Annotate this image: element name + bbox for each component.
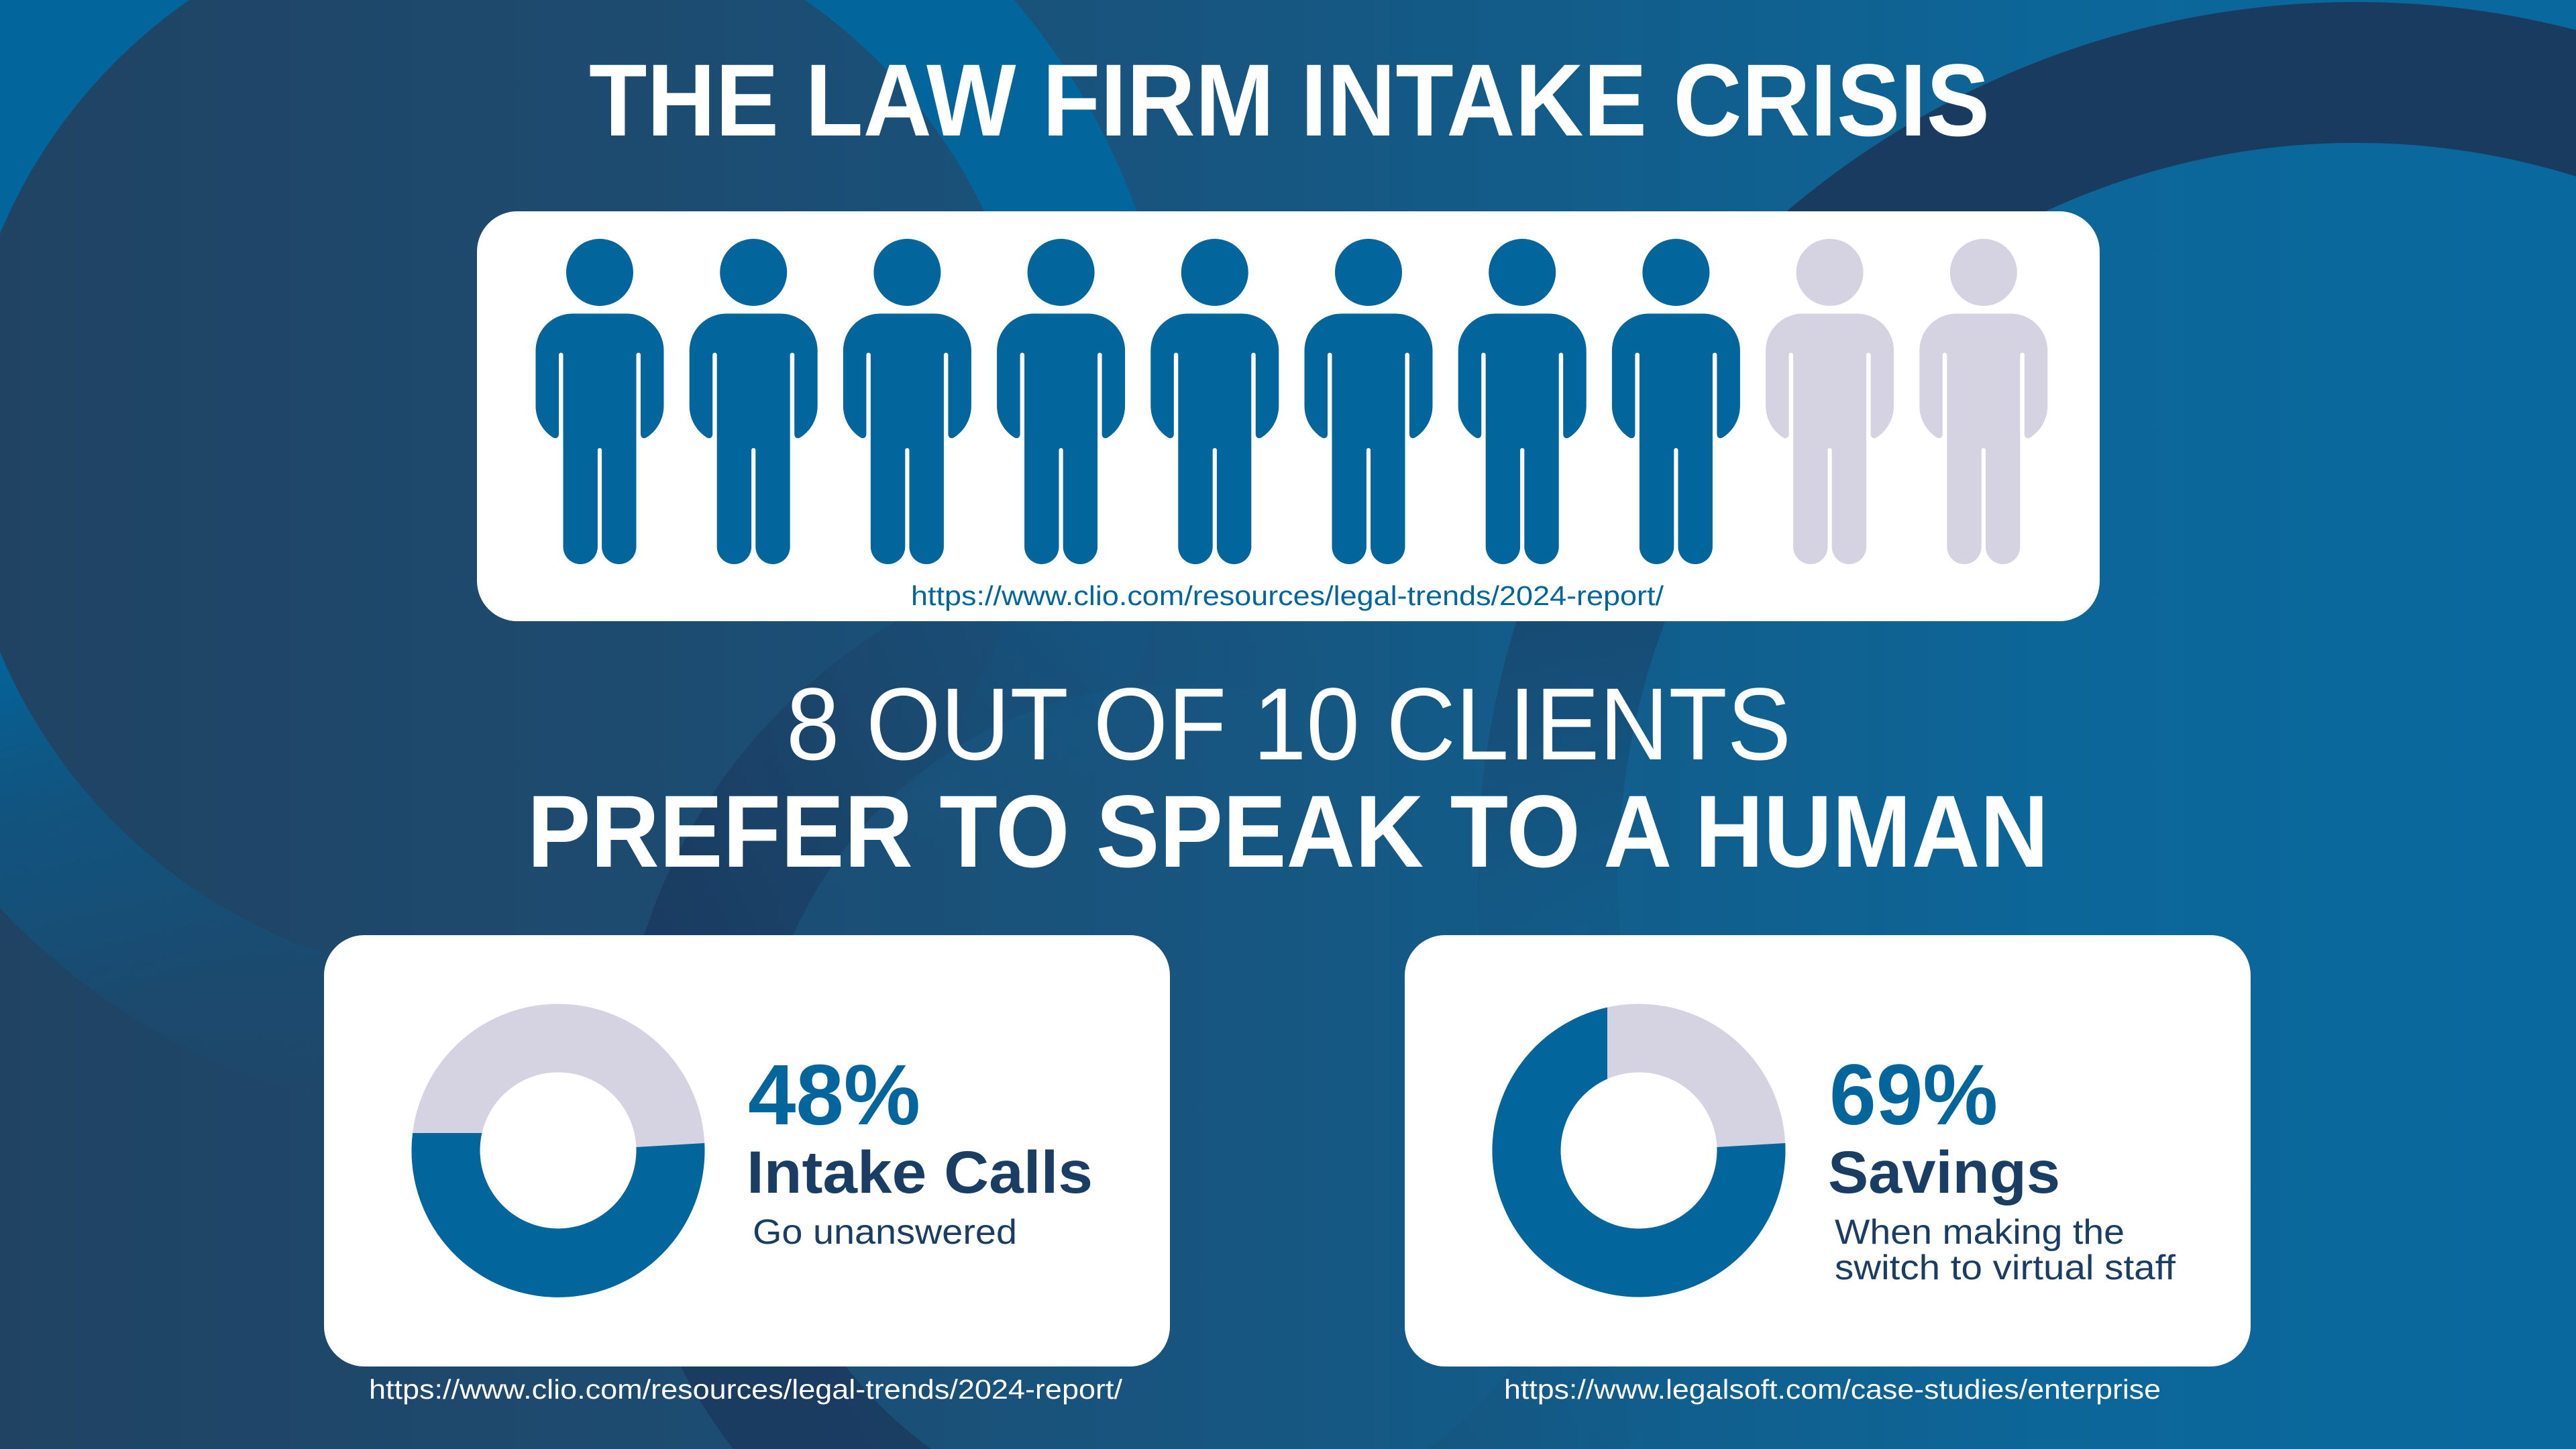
donut chart: 69% bbox=[1492, 1008, 1785, 1297]
stat: 69%: 69% bbox=[1829, 1047, 1998, 1143]
donut chart: 48% bbox=[411, 1038, 704, 1297]
heading: prefer to speak to a human: PREFER TO SPEAK TO A HUMAN bbox=[527, 774, 2049, 889]
description: when making the switch: switch to virtual staff bbox=[1835, 1248, 2176, 1287]
source link: https://www.clio.com/resources/legal-trends/2024-report/ bbox=[911, 580, 1664, 611]
icon: eight blue people bbox=[535, 239, 1740, 564]
source link: legalsoft: https://www.legalsoft.com/case-studies/enterprise bbox=[1504, 1374, 2161, 1405]
source link: clio: https://www.clio.com/resources/legal-trends/2024-report/ bbox=[369, 1374, 1123, 1405]
description: when making the switch: When making the bbox=[1835, 1213, 2125, 1252]
stat: 48%: 48% bbox=[748, 1047, 920, 1143]
panel: intake calls bbox=[324, 935, 1170, 1366]
label: intake calls: Intake Calls bbox=[747, 1138, 1093, 1205]
label: savings: Savings bbox=[1828, 1138, 2060, 1205]
panel: savings bbox=[1405, 935, 2251, 1366]
icon: two lavender people bbox=[1766, 239, 2047, 564]
description: when making the switch bbox=[1835, 1213, 2176, 1287]
heading: 8 out of 10 clients: 8 OUT OF 10 CLIENTS bbox=[786, 667, 1791, 782]
description: go unanswered: Go unanswered bbox=[753, 1213, 1017, 1252]
title: THE LAW FIRM INTAKE CRISIS bbox=[589, 43, 1990, 158]
panel: pictogram of ten people bbox=[477, 211, 2100, 621]
